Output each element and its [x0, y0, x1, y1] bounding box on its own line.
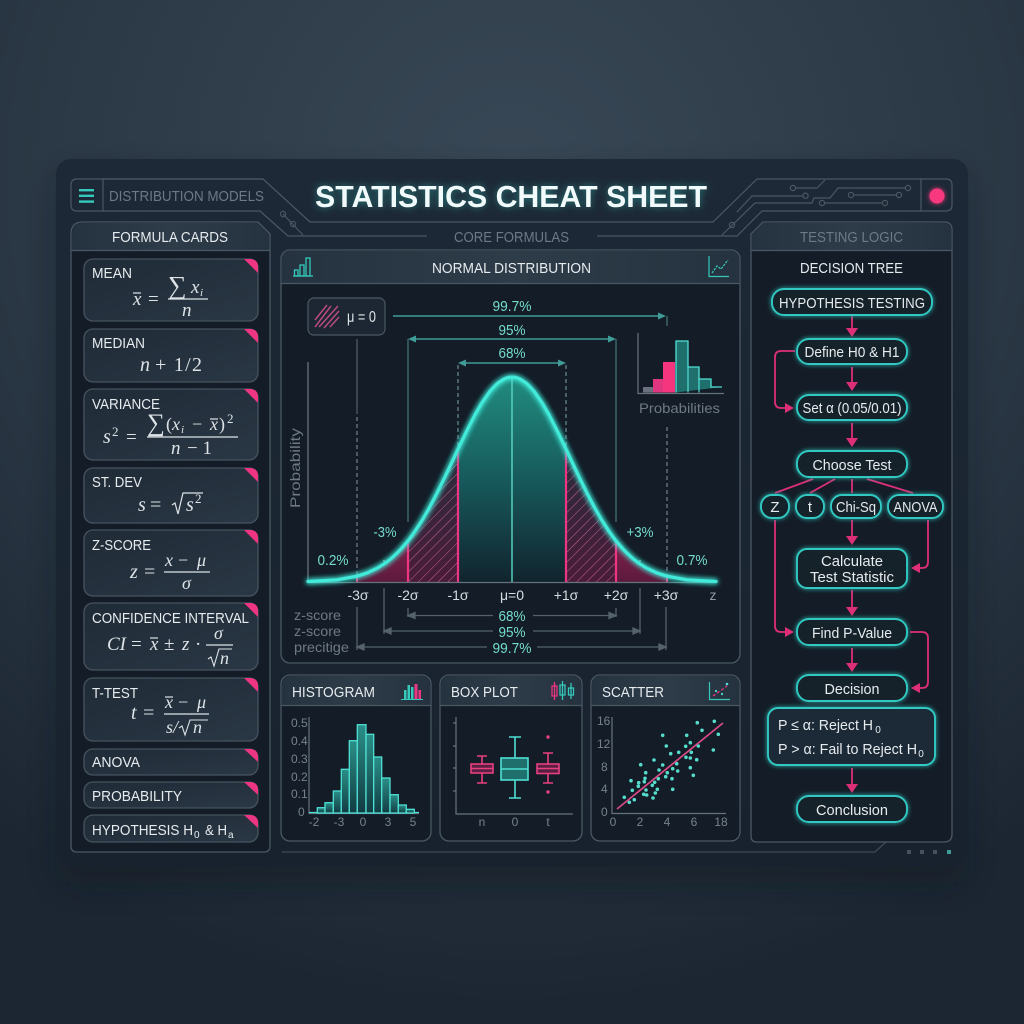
card: median: MEDIAN	[92, 335, 145, 352]
heading: testing logic: TESTING LOGIC	[800, 229, 903, 246]
card: confidence interval: σ	[214, 623, 224, 643]
card: variance: − 1	[187, 438, 212, 459]
node: chi-square	[831, 495, 881, 518]
node: anova: ANOVA	[894, 499, 938, 516]
chart: scatter plot: 8	[601, 760, 608, 774]
card: t-test: =	[143, 702, 154, 724]
card: standard deviation: ST. DEV	[92, 474, 142, 491]
panel: decision tree	[751, 222, 952, 842]
center area fill	[458, 377, 566, 582]
card: variance: 2	[227, 411, 234, 426]
card: mean: MEAN	[92, 265, 132, 282]
card: mean: i	[200, 287, 203, 299]
chart: histogram bars: -3	[334, 815, 345, 829]
node: choose test: Choose Test	[812, 457, 892, 474]
icon: menu	[79, 189, 94, 203]
card: confidence interval: ·	[195, 634, 201, 655]
card: confidence interval: ±	[164, 634, 174, 655]
legend: mean: μ = 0	[347, 309, 376, 326]
card: z-score: μ	[196, 550, 206, 570]
chart: box plots	[453, 717, 573, 829]
card: t-test	[84, 678, 258, 741]
panel: histogram: HISTOGRAM	[292, 684, 375, 701]
node: decision rules: P ≤ α: Reject H	[778, 717, 873, 734]
node: z test: Z	[770, 499, 780, 516]
node: decision: Decision	[824, 681, 880, 698]
icon: line chart	[709, 256, 729, 276]
header tab label: DISTRIBUTION MODELS	[109, 188, 264, 205]
card: median: n	[140, 354, 150, 376]
card: variance: =	[126, 427, 137, 448]
legend: mean	[308, 298, 385, 335]
chart: histogram bars: -2	[309, 815, 320, 829]
card: t-test: x	[164, 692, 173, 712]
node: conclusion	[797, 796, 907, 822]
card: standard deviation: s	[186, 494, 194, 516]
card: z-score: Z-SCORE	[92, 537, 151, 554]
node: find p-value	[797, 619, 907, 645]
chart: scatter plot: 18	[714, 815, 728, 829]
panel: normal distribution	[281, 250, 740, 663]
node: set alpha: Set α (0.05/0.01)	[802, 400, 902, 417]
node: calculate test statistic	[797, 549, 907, 588]
chart: mini probabilities histogram	[638, 333, 724, 416]
sigma axis labels: -2σ	[397, 587, 419, 603]
chart: scatter plot: 2	[637, 815, 644, 829]
card: hypothesis: HYPOTHESIS H	[92, 822, 193, 839]
card: z-score	[84, 530, 258, 596]
heading: formula cards: FORMULA CARDS	[112, 229, 228, 246]
curve line	[308, 377, 716, 582]
baseline and y axis	[308, 362, 716, 582]
card: confidence interval: z	[181, 634, 190, 655]
sigma axis labels: +3σ	[654, 587, 679, 603]
chart: histogram bars: 0.4	[291, 734, 308, 748]
node: decision rules: 0	[875, 725, 881, 736]
card: confidence interval: n	[220, 648, 229, 668]
icon: scatter	[710, 682, 730, 700]
node: z test	[761, 495, 789, 518]
card: variance: x	[209, 414, 218, 434]
card: variance: i	[181, 424, 184, 436]
chart: scatter plot: 6	[691, 815, 698, 829]
sigma lines	[357, 450, 667, 582]
sigma axis labels: -3σ	[347, 587, 369, 603]
sigma axis labels: -1σ	[447, 587, 469, 603]
node: decision rules: 0	[918, 749, 924, 760]
header frame with circuit lines	[71, 179, 952, 236]
card: standard deviation: 2	[195, 491, 202, 506]
card: standard deviation: =	[150, 494, 161, 516]
node: hypothesis testing	[772, 289, 932, 315]
chart: histogram bars: 5	[410, 815, 417, 829]
top range markers: 99.7%	[492, 298, 532, 315]
bottom labels: z-score	[294, 607, 341, 623]
chart: scatter plot: 12	[597, 737, 611, 751]
card: z-score: σ	[182, 573, 192, 593]
hatched areas	[408, 449, 616, 582]
card: variance: VARIANCE	[92, 396, 160, 413]
guide lines	[357, 316, 667, 582]
card: variance: 2	[112, 424, 118, 439]
card: mean: x	[132, 289, 142, 310]
card: t-test: μ	[196, 692, 206, 712]
chart: scatter plot: 4	[601, 782, 608, 796]
tail percentages: -3%	[374, 524, 396, 541]
node: decision rules	[768, 708, 935, 765]
y axis label: Probability	[287, 428, 303, 508]
bottom range markers	[357, 588, 666, 657]
chart: mini probabilities histogram: Probabilities	[639, 400, 720, 416]
card: t-test: T-TEST	[92, 685, 138, 702]
top range markers: 68%	[498, 345, 526, 362]
card: variance: x	[171, 414, 180, 434]
sigma axis labels: +2σ	[604, 587, 629, 603]
card: variance: −	[192, 414, 202, 434]
card: variance	[84, 389, 258, 460]
node: calculate test statistic: Test Statistic	[810, 569, 894, 586]
top range markers: 95%	[498, 322, 526, 339]
card: median: + 1/2	[155, 354, 202, 376]
chart: histogram bars	[291, 716, 419, 829]
node: t test	[796, 495, 824, 518]
chart: histogram bars: 3	[385, 815, 392, 829]
card: t-test: t	[131, 702, 137, 724]
card: probability	[84, 782, 258, 808]
tail percentages: 0.7%	[676, 552, 708, 569]
node: conclusion: Conclusion	[816, 802, 888, 819]
card: confidence interval: x	[149, 634, 159, 655]
card: standard deviation	[84, 468, 258, 523]
card: hypothesis: & H	[205, 822, 227, 839]
card: hypothesis	[84, 815, 258, 842]
card: variance: n	[171, 438, 180, 459]
node: t test: t	[808, 499, 813, 516]
panel: scatter	[591, 675, 740, 841]
sigma axis labels: +1σ	[554, 587, 579, 603]
card: z-score: x	[164, 550, 173, 570]
icon: box plot	[552, 681, 574, 700]
chart: scatter plot: 0	[610, 815, 617, 829]
chart: scatter plot: 4	[664, 815, 671, 829]
status indicator	[930, 188, 944, 204]
arrows: flow connectors	[775, 316, 928, 793]
card: mean	[84, 259, 258, 321]
node: decision	[797, 675, 907, 701]
card: confidence interval	[84, 603, 258, 670]
node: find p-value: Find P-Value	[812, 625, 892, 642]
card: t-test: n	[193, 717, 202, 737]
card: mean: n	[182, 300, 192, 321]
chart: box plots: 0	[512, 815, 519, 829]
chart: box plots: t	[546, 815, 550, 829]
chart: box plots: n	[479, 815, 485, 829]
chart: histogram bars: 0.5	[291, 716, 308, 730]
node: calculate test statistic: Calculate	[821, 553, 883, 570]
card: confidence interval: CI	[107, 634, 128, 655]
bottom range markers: 99.7%	[492, 640, 532, 657]
node: choose test	[797, 451, 907, 477]
node: chi-square: Chi-Sq	[836, 499, 876, 516]
tail percentages: +3%	[626, 524, 654, 541]
card: z-score: z	[129, 561, 138, 583]
icon: histogram	[401, 684, 423, 700]
tail percentages	[318, 524, 708, 569]
chart: histogram bars: 0.2	[291, 770, 308, 784]
heading: decision tree: DECISION TREE	[800, 260, 903, 277]
panel: scatter: SCATTER	[602, 684, 664, 701]
chart: histogram bars: 0.1	[291, 787, 308, 801]
sigma axis labels: z	[710, 587, 716, 603]
bottom labels: z-score	[294, 623, 341, 639]
card: t-test: s/	[166, 717, 180, 737]
card: probability: PROBABILITY	[92, 788, 182, 805]
card: mean: =	[148, 289, 159, 310]
card: z-score: −	[178, 550, 188, 570]
chart: histogram bars: 0	[298, 805, 305, 819]
chart: scatter plot: 16	[597, 714, 611, 728]
card: hypothesis: a	[228, 830, 234, 841]
card: z-score: =	[144, 561, 155, 583]
node: decision rules: P > α: Fail to Reject H	[778, 741, 917, 758]
chart: scatter plot	[597, 714, 728, 829]
card: anova	[84, 749, 258, 775]
card: variance: )	[219, 414, 225, 435]
node: hypothesis testing: HYPOTHESIS TESTING	[779, 295, 925, 312]
sigma axis labels: μ=0	[500, 587, 524, 603]
card: confidence interval: =	[131, 634, 142, 655]
sigma axis labels	[347, 587, 716, 603]
card: t-test: −	[178, 692, 188, 712]
main dashboard panel	[56, 159, 968, 882]
core formulas label: CORE FORMULAS	[454, 229, 569, 246]
card: variance: (	[166, 414, 172, 435]
heading: normal distribution: NORMAL DISTRIBUTION	[432, 260, 591, 277]
footer rule and page dots	[282, 842, 951, 854]
card: confidence interval: CONFIDENCE INTERVAL	[92, 610, 249, 627]
panel: histogram	[281, 675, 431, 841]
bottom range markers: 95%	[498, 624, 526, 641]
chart: histogram bars: 0.3	[291, 752, 308, 766]
bottom labels	[294, 607, 349, 655]
card: mean: x	[190, 277, 200, 298]
chart: bell curve	[308, 316, 716, 582]
chart: histogram bars: 0	[360, 815, 367, 829]
card: variance: s	[103, 426, 111, 448]
card: median	[84, 329, 258, 382]
pink tails	[357, 541, 667, 582]
panel: box plot	[440, 675, 582, 841]
bottom labels: precitige	[294, 639, 349, 655]
card: anova: ANOVA	[92, 754, 140, 771]
node: anova	[888, 495, 943, 518]
tail percentages: 0.2%	[318, 552, 348, 569]
node: define hypotheses: Define H0 & H1	[804, 344, 900, 361]
top range markers	[393, 298, 666, 366]
icon: bars	[293, 258, 313, 276]
node: define hypotheses	[797, 339, 907, 364]
panel: formula cards	[71, 222, 270, 852]
chart: scatter plot: 0	[601, 805, 608, 819]
title: STATISTICS CHEAT SHEET	[315, 179, 707, 214]
panel: box plot: BOX PLOT	[451, 684, 518, 701]
card: mean: ∑	[168, 271, 187, 300]
card: variance: ∑	[147, 410, 165, 437]
card: hypothesis: 0	[194, 830, 200, 841]
node: set alpha	[797, 395, 907, 420]
card: standard deviation: s	[138, 494, 146, 516]
bottom range markers: 68%	[498, 608, 526, 625]
